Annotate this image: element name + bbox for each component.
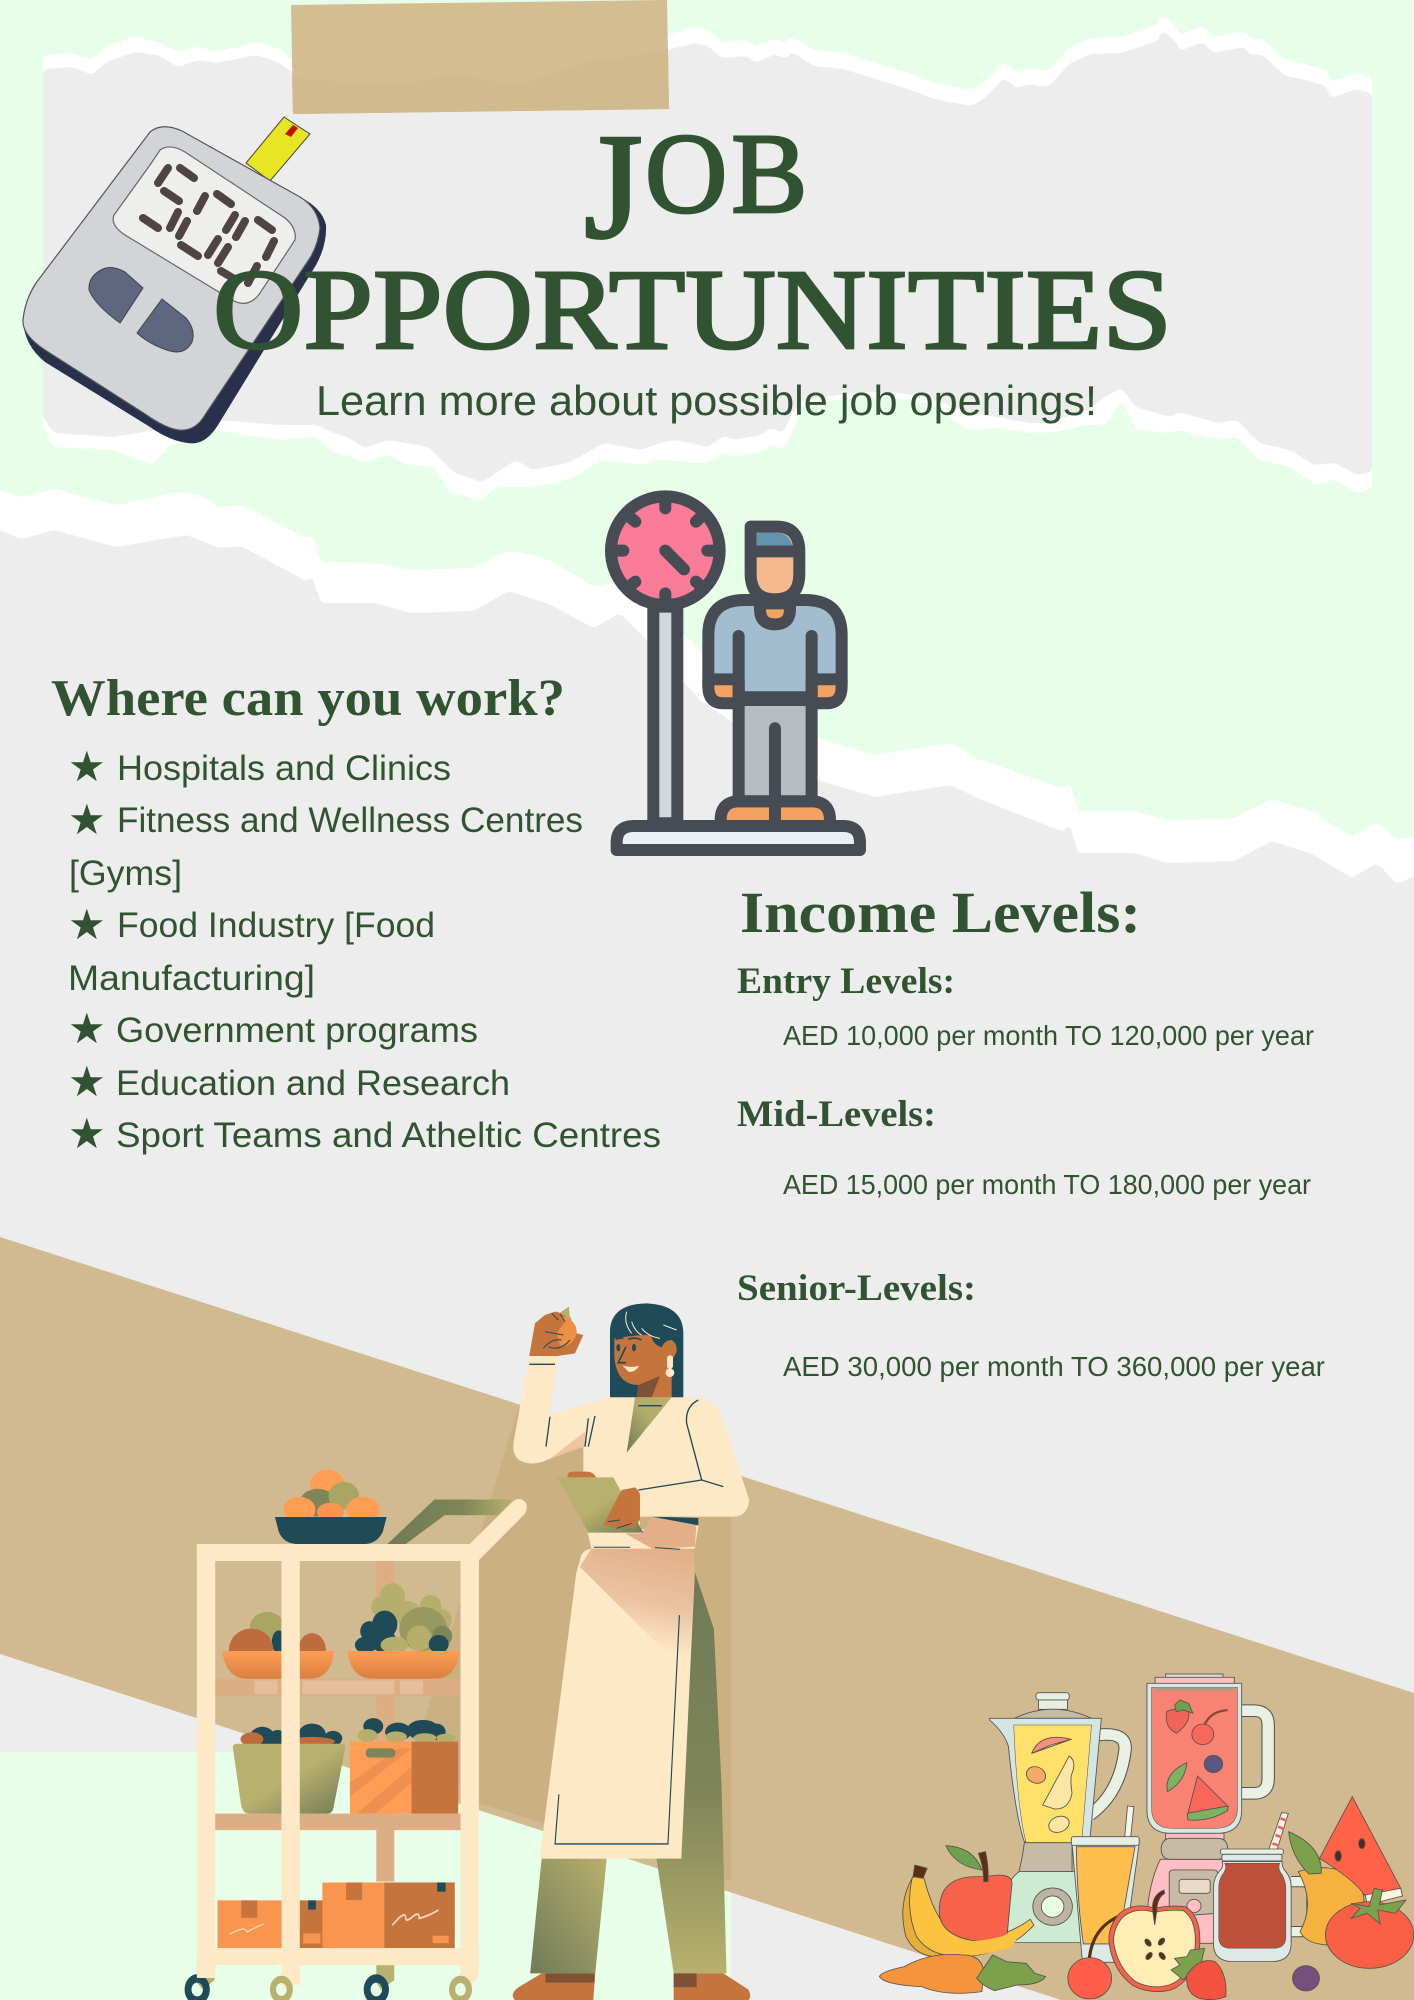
income: entry level: Entry Levels: bbox=[737, 961, 955, 1002]
woman hair bbox=[610, 1303, 683, 1397]
illustration: food cart and lower figure bbox=[188, 1470, 750, 2000]
list: workplaces: Hospitals and Clinics bbox=[117, 749, 451, 788]
shelf one grapes bbox=[347, 1583, 459, 1679]
lower shelf boxes bbox=[218, 1882, 455, 1948]
income: senior level: Senior-Levels: bbox=[737, 1268, 976, 1309]
illustration: blenders and fruit bbox=[879, 1674, 1414, 2000]
woman waist shading bbox=[594, 1517, 698, 1549]
peach leaf bbox=[1289, 1832, 1321, 1874]
illustration: upper figure bbox=[513, 1303, 749, 1549]
income: entry level: AED 10,000 per month TO 120,000 per year bbox=[783, 1020, 1314, 1051]
list: workplaces: Fitness and Wellness Centres bbox=[117, 801, 583, 840]
icon: person on scale bbox=[611, 496, 860, 850]
shelf one fruit bbox=[222, 1612, 334, 1679]
list: workplaces: Food Industry [Food bbox=[117, 906, 435, 945]
meter body bbox=[23, 127, 320, 430]
meter buttons bbox=[89, 268, 143, 323]
income: senior level bbox=[737, 1268, 1325, 1382]
list: workplaces: [Gyms] bbox=[69, 854, 182, 893]
panel: light green floor bbox=[0, 1752, 731, 2000]
tape bbox=[291, 0, 669, 114]
list: workplaces: ★ bbox=[68, 742, 106, 791]
watermelon slice bbox=[1298, 1797, 1402, 1945]
meter shadow bbox=[23, 197, 326, 443]
woman shoes bbox=[513, 1973, 750, 2000]
income: mid level: Mid-Levels: bbox=[737, 1094, 936, 1135]
woman coat bbox=[513, 1356, 749, 1533]
top bowl of fruit bbox=[275, 1470, 387, 1544]
test strip bbox=[246, 117, 310, 181]
woman waist bbox=[588, 1526, 699, 1549]
list: workplaces: Education and Research bbox=[116, 1064, 510, 1103]
title: OPPORTUNITIES bbox=[213, 246, 1172, 373]
income: mid level: AED 15,000 per month TO 180,000 per year bbox=[783, 1169, 1311, 1200]
panel: diagonal tan band bbox=[0, 1237, 1414, 2000]
banana over apple bbox=[936, 1925, 1026, 1957]
tomato bbox=[1325, 1888, 1414, 1968]
list: workplaces bbox=[68, 742, 661, 1158]
cherry bbox=[1068, 1917, 1118, 1999]
cart speckle bbox=[255, 1680, 423, 1694]
strawberry bbox=[1171, 1948, 1226, 2000]
seven segment digits bbox=[143, 168, 274, 283]
list: workplaces: Government programs bbox=[116, 1011, 478, 1050]
list: workplaces: ★ bbox=[68, 900, 106, 949]
woman face bbox=[614, 1312, 677, 1397]
list: workplaces: ★ bbox=[68, 795, 106, 844]
scale pole bbox=[653, 607, 677, 823]
yellow blender bbox=[990, 1693, 1125, 1943]
orange juice glass bbox=[1071, 1806, 1139, 1962]
shelf two basket bbox=[233, 1724, 345, 1814]
shelf two box bbox=[350, 1718, 458, 1814]
woman trousers bbox=[530, 1572, 726, 1973]
woman raised hand with fruit bbox=[529, 1307, 583, 1356]
cart rear frame bbox=[214, 1560, 461, 1882]
red apple bbox=[939, 1846, 1012, 1942]
banana bbox=[903, 1865, 1034, 1957]
title: OB bbox=[645, 110, 811, 237]
scale base bbox=[617, 826, 860, 850]
meter screen bbox=[113, 147, 295, 303]
income: senior level: AED 30,000 per month TO 360,000 per year bbox=[783, 1351, 1325, 1382]
carrot bbox=[879, 1954, 1046, 1993]
icon: glucose meter bbox=[23, 117, 326, 443]
panel: darker tan shadow bbox=[417, 1411, 731, 1881]
rear wheels bbox=[188, 1965, 394, 2000]
heading: income levels: Income Levels: bbox=[740, 880, 1141, 945]
apple half bbox=[1109, 1890, 1200, 1992]
title bbox=[213, 102, 1172, 373]
person trousers bbox=[739, 700, 812, 826]
list: workplaces: ★ bbox=[68, 1004, 106, 1053]
income: mid level bbox=[737, 1094, 1311, 1200]
scale dial bbox=[611, 496, 720, 605]
panel: lower torn paper bbox=[0, 489, 1414, 2000]
panel: upper torn paper bbox=[43, 14, 1372, 500]
list: workplaces: Sport Teams and Atheltic Centres bbox=[116, 1116, 661, 1155]
list: workplaces: ★ bbox=[68, 1109, 106, 1158]
cart handle bbox=[387, 1499, 512, 1544]
person shirt bbox=[708, 600, 842, 703]
woman apron bbox=[540, 1549, 695, 1859]
subtitle: Learn more about possible job openings! bbox=[316, 377, 1097, 424]
front wheels bbox=[273, 1976, 479, 2000]
income: entry level bbox=[737, 961, 1314, 1051]
cart front frame bbox=[197, 1499, 527, 1985]
title: J bbox=[584, 102, 643, 270]
mason jar bbox=[1213, 1813, 1312, 1962]
red blender bbox=[1147, 1674, 1268, 1943]
blueberry bbox=[1293, 1966, 1319, 1991]
heading: where can you work: Where can you work? bbox=[51, 670, 565, 727]
list: workplaces: Manufacturing] bbox=[68, 959, 315, 998]
person head bbox=[751, 527, 799, 599]
woman clipboard bbox=[557, 1472, 643, 1533]
list: workplaces: ★ bbox=[68, 1057, 106, 1106]
person shoes bbox=[721, 801, 830, 826]
